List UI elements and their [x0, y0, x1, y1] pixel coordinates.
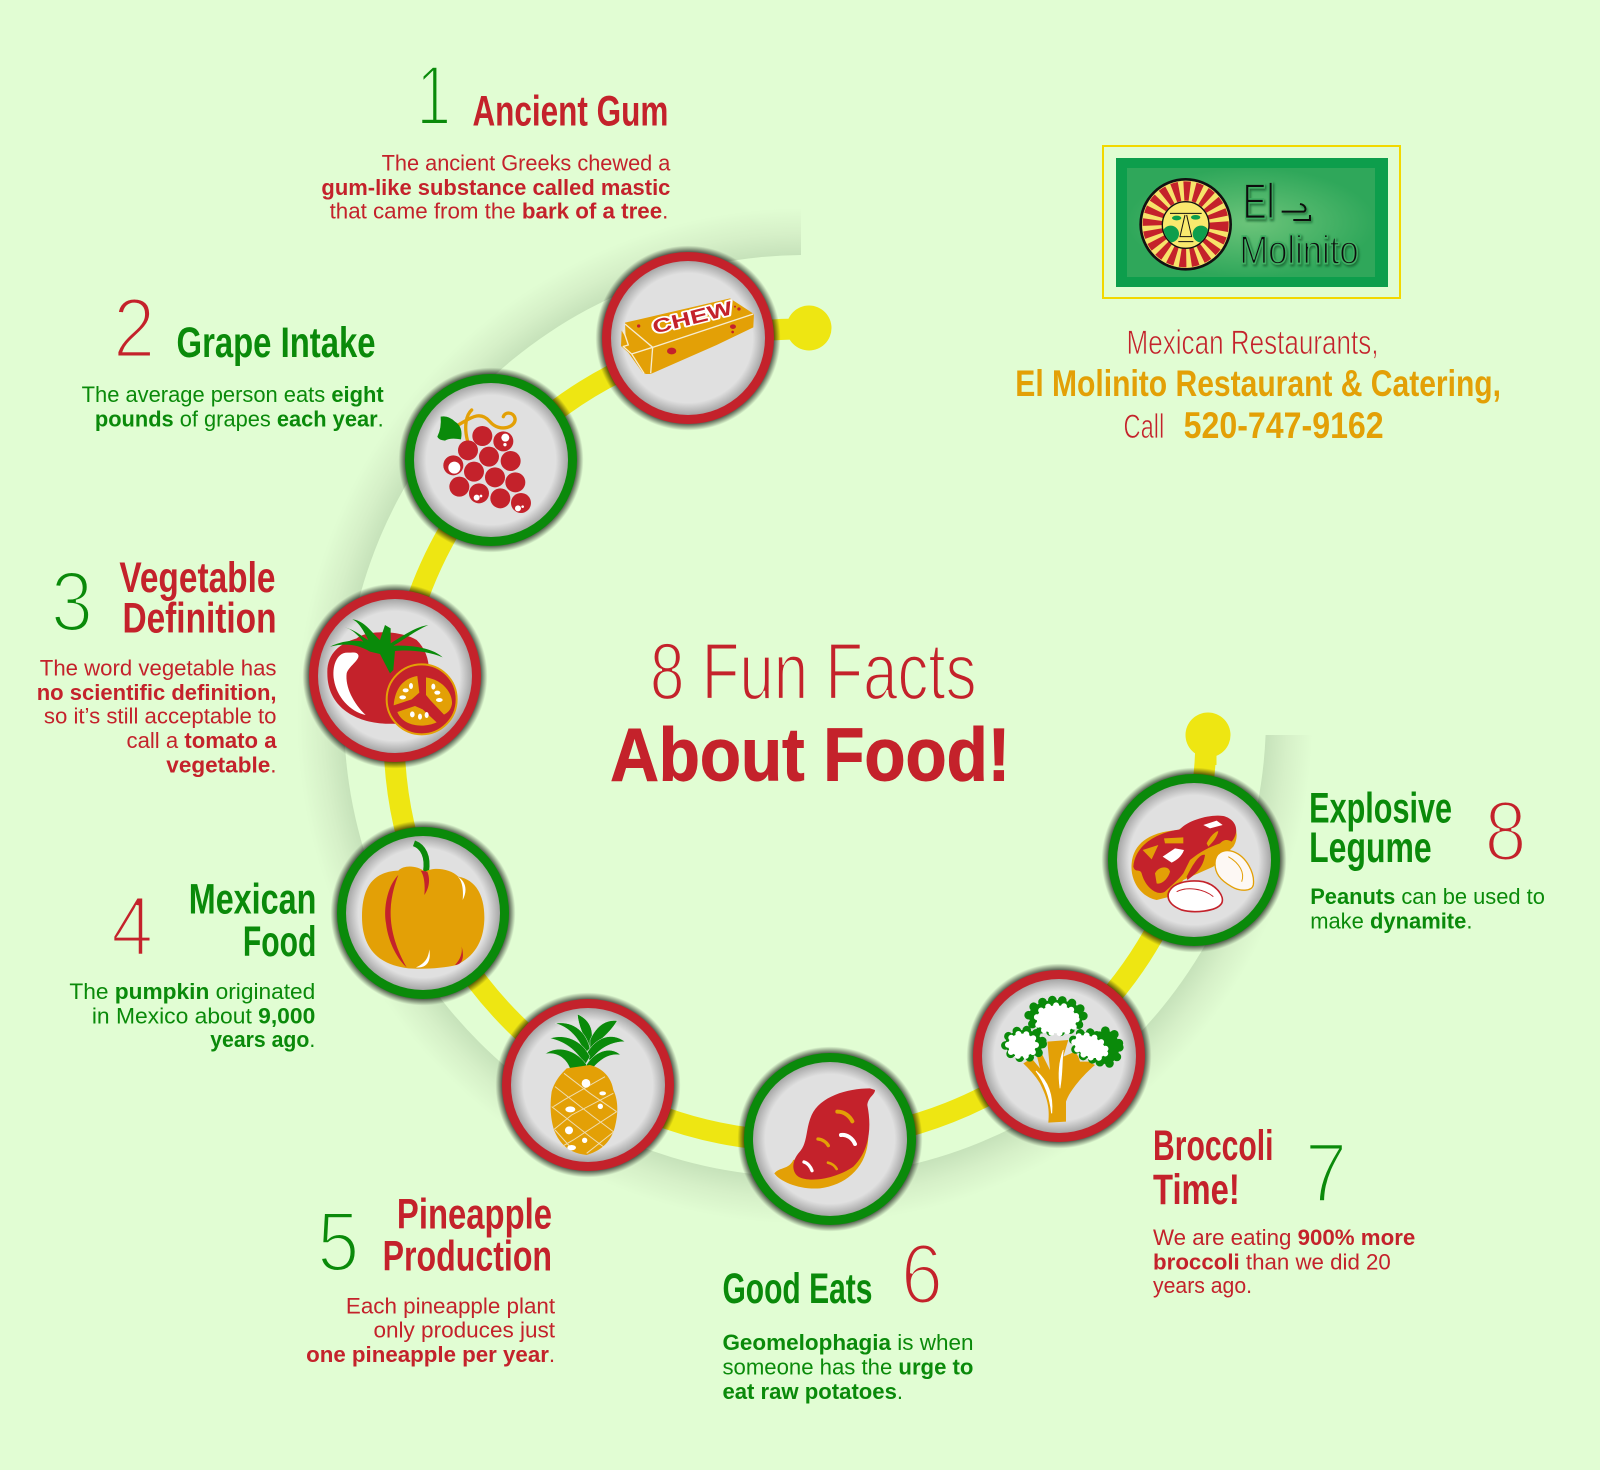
heading: Definition	[122, 595, 277, 643]
heading: Mexican	[189, 875, 316, 923]
number 7: 7	[1305, 1125, 1347, 1220]
body text	[321, 150, 671, 223]
badge 3: tomato	[302, 584, 488, 768]
body text: vegetable.	[166, 752, 277, 777]
fact 4: mexican food	[69, 875, 316, 1052]
body text: Peanuts can be used to	[1310, 884, 1545, 909]
crescent shadow behind the timeline	[297, 208, 1313, 1224]
number 6: 6	[901, 1226, 943, 1321]
badge 6: sweet potato	[738, 1046, 922, 1232]
body text	[69, 979, 315, 1052]
icon: peanut	[1131, 816, 1254, 912]
title	[610, 627, 1010, 797]
badge 8: peanut	[1102, 768, 1286, 952]
number 4: 4	[111, 878, 153, 973]
body text: Each pineapple plant	[346, 1293, 556, 1318]
icon: gum pack	[621, 298, 754, 374]
heading: Good Eats	[722, 1265, 872, 1313]
heading: Explosive	[1309, 784, 1452, 832]
body text: call a tomato a	[127, 728, 277, 753]
icon: sweet potato	[774, 1088, 875, 1189]
badge 2: grapes	[398, 368, 584, 552]
yellow timeline arc	[394, 306, 1230, 1141]
icon: gum pack: CHEW	[651, 298, 736, 339]
body text: make dynamite.	[1310, 909, 1472, 934]
icon: pumpkin	[362, 843, 484, 969]
logo	[1103, 146, 1400, 298]
logo wordmark	[1239, 173, 1359, 272]
body text: pounds of grapes each year.	[95, 407, 384, 432]
heading: Broccoli	[1153, 1122, 1273, 1170]
body text: so it’s still acceptable to	[44, 703, 277, 728]
icon: broccoli	[1005, 1000, 1119, 1123]
body text	[1153, 1225, 1415, 1298]
fact 5: pineapple production	[306, 1191, 556, 1367]
body text	[1310, 884, 1545, 934]
body text: broccoli than we did 20	[1153, 1249, 1391, 1274]
call label: Call	[1123, 408, 1164, 446]
body text: years ago.	[1153, 1273, 1252, 1298]
body text	[82, 382, 384, 432]
phone number: 520-747-9162	[1184, 405, 1384, 446]
body text: one pineapple per year.	[306, 1342, 555, 1367]
heading	[119, 554, 277, 643]
title line 1: 8 Fun Facts	[650, 627, 977, 717]
fact 3: vegetable definition	[37, 554, 277, 777]
body text: Geomelophagia is when	[722, 1330, 973, 1355]
badge 5: pineapple	[496, 992, 680, 1178]
heading: Food	[243, 918, 316, 966]
heading: Ancient Gum	[472, 88, 668, 136]
body text: years ago.	[210, 1027, 315, 1052]
icon: tomato	[327, 619, 457, 734]
restaurant contact text	[1015, 324, 1501, 446]
body text: We are eating 900% more	[1153, 1225, 1415, 1250]
fact 7: broccoli time	[1153, 1122, 1415, 1298]
heading: Vegetable	[119, 554, 276, 602]
fact 1: ancient gum	[321, 47, 671, 223]
body text	[37, 656, 277, 777]
body text: The ancient Greeks chewed a	[382, 150, 671, 175]
logo wordmark: Molinito	[1239, 228, 1359, 272]
logo wordmark: El	[1243, 173, 1275, 229]
heading	[189, 875, 316, 966]
body text: only produces just	[373, 1318, 556, 1343]
fact 8: explosive legume	[1309, 783, 1545, 934]
tagline: Mexican Restaurants,	[1127, 324, 1379, 362]
number 3: 3	[51, 554, 93, 649]
heading	[383, 1191, 552, 1280]
body text: in Mexico about 9,000	[92, 1003, 315, 1028]
badge 7: broccoli	[966, 964, 1152, 1148]
number 1: 1	[416, 47, 451, 142]
heading	[1309, 784, 1452, 872]
body text	[722, 1330, 973, 1404]
number 5: 5	[317, 1193, 359, 1288]
number 2: 2	[113, 280, 155, 375]
fact 6: good eats	[722, 1226, 973, 1404]
body text: gum-like substance called mastic	[321, 175, 670, 200]
icon: grapes	[437, 410, 531, 513]
body text: The average person eats eight	[82, 382, 384, 407]
heading: Legume	[1309, 824, 1432, 872]
body text: that came from the bark of a tree.	[330, 198, 668, 223]
body text: eat raw potatoes.	[722, 1379, 903, 1404]
body text: The pumpkin originated	[69, 979, 315, 1004]
body text: no scientific definition,	[37, 680, 277, 705]
heading: Pineapple	[397, 1191, 552, 1239]
badge 1: chewing gum	[596, 246, 780, 430]
body text	[306, 1293, 556, 1367]
body text: The word vegetable has	[40, 656, 277, 681]
badge 4: pumpkin	[330, 820, 516, 1006]
logo sun	[1139, 178, 1232, 271]
restaurant name: El Molinito Restaurant & Catering,	[1015, 363, 1501, 404]
number 8: 8	[1485, 783, 1527, 878]
heading: Grape Intake	[177, 319, 376, 367]
body text: someone has the urge to	[722, 1354, 973, 1379]
icon: pineapple	[545, 1014, 625, 1155]
heading: Time!	[1153, 1166, 1240, 1214]
title line 2: About Food!	[610, 713, 1010, 797]
heading	[1153, 1122, 1273, 1214]
fact 2: grape intake	[82, 280, 384, 432]
heading: Production	[383, 1232, 552, 1280]
